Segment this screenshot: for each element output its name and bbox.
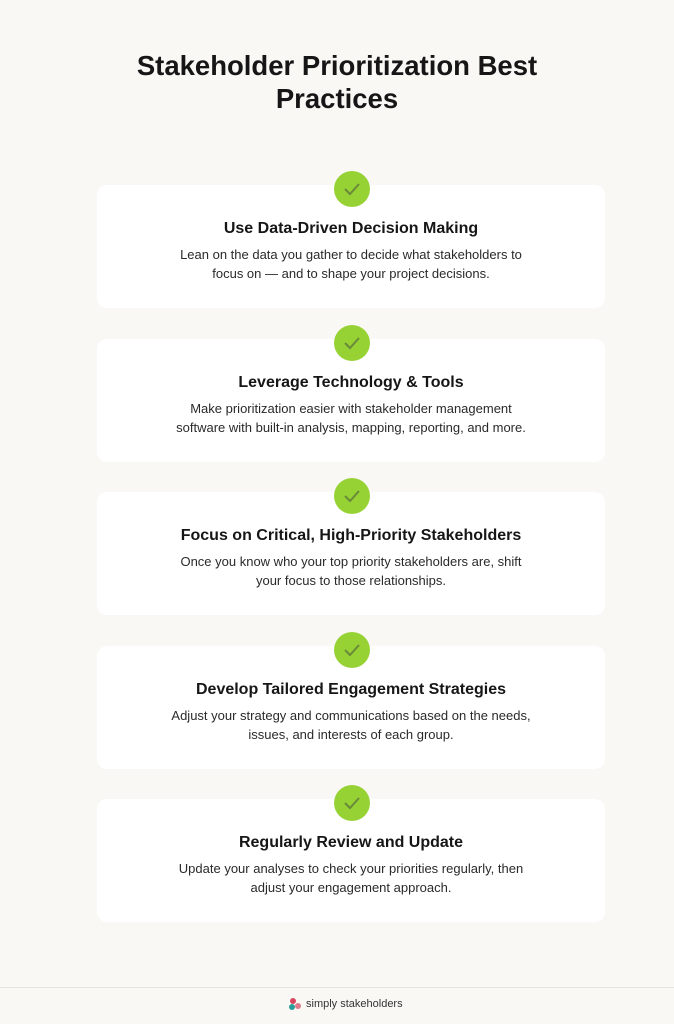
icon: check 4	[334, 632, 370, 668]
icon: check 3	[334, 478, 370, 514]
card 4: Adjust your strategy and communications based on the needs, issues, and interests of each group.	[171, 708, 531, 742]
title: Stakeholder Prioritization Best	[137, 50, 537, 81]
icon: check 5	[334, 785, 370, 821]
title	[137, 50, 537, 114]
card 2	[97, 339, 605, 462]
card 5: Regularly Review and Update	[239, 834, 463, 851]
card 3: Focus on Critical, High-Priority Stakeholders	[181, 527, 521, 544]
card 2: Make prioritization easier with stakeholder management software with built-in analysis, mapping, reporting, and more.	[176, 401, 526, 435]
icon: check 2	[334, 325, 370, 361]
card 5: Update your analyses to check your priorities regularly, then adjust your engagement approach.	[179, 861, 523, 895]
card 1: Use Data-Driven Decision Making	[224, 220, 478, 237]
title: Practices	[276, 83, 398, 114]
card 5	[97, 799, 605, 922]
card 2: Leverage Technology & Tools	[238, 374, 464, 391]
icon: check 1	[334, 171, 370, 207]
card 4: Develop Tailored Engagement Strategies	[196, 681, 506, 698]
card 1: Lean on the data you gather to decide what stakeholders to focus on — and to shape your project decisions.	[180, 247, 522, 281]
card 4	[97, 646, 605, 769]
footer logo: simply stakeholders	[306, 998, 403, 1010]
card 3	[97, 492, 605, 615]
card 1	[97, 185, 605, 308]
card 3: Once you know who your top priority stakeholders are, shift your focus to those relationships.	[180, 554, 522, 588]
